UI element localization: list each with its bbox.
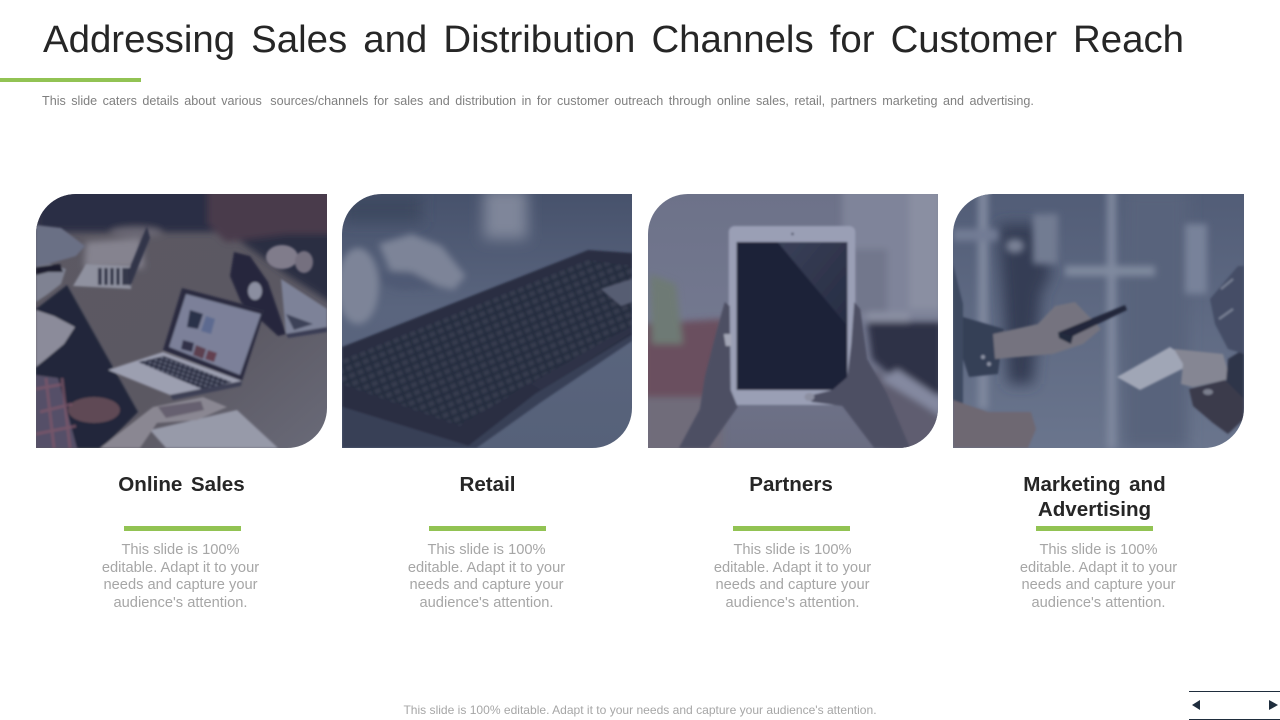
right laptops: [281, 279, 327, 334]
description: This slide is 100%: [1039, 542, 1158, 558]
description: audience's attention.: [420, 595, 554, 611]
description: needs and capture your: [716, 577, 870, 593]
photo: laptops on a wooden table: [36, 194, 327, 448]
footer note: This slide is 100% editable. Adapt it to your needs and capture your audience's attention.: [403, 703, 877, 717]
panel: partners: [648, 194, 938, 611]
green divider: [733, 526, 850, 531]
description: [714, 542, 871, 611]
description: audience's attention.: [1032, 595, 1166, 611]
heading: Partners: [749, 473, 833, 496]
heading: Online Sales: [118, 473, 245, 496]
description: [408, 542, 565, 611]
lower left hand: [953, 400, 1036, 448]
navigation arrows: [1189, 691, 1280, 720]
panel: online sales: [36, 194, 327, 611]
description: This slide is 100%: [427, 542, 546, 558]
person's hands behind: [266, 245, 298, 269]
description: audience's attention.: [726, 595, 860, 611]
right hand: [804, 302, 910, 448]
description: editable. Adapt it to your: [1020, 560, 1177, 576]
notebook and hand: [150, 410, 278, 448]
arm and phone: [993, 302, 1101, 359]
description: editable. Adapt it to your: [408, 560, 565, 576]
description: needs and capture your: [1022, 577, 1176, 593]
heading: Marketing and: [1023, 473, 1166, 496]
description: needs and capture your: [410, 577, 564, 593]
left person: [36, 225, 85, 266]
center laptop: [163, 288, 265, 381]
description: [102, 542, 259, 611]
green divider: [124, 526, 241, 531]
card and right hand: [1117, 347, 1194, 390]
panel: retail: [342, 194, 632, 611]
heading: Retail: [459, 473, 516, 496]
description: [1020, 542, 1177, 611]
green divider: [429, 526, 546, 531]
panel: marketing and advertising: [953, 194, 1244, 611]
subtitle: This slide caters details about various sources/channels for sales and distribution in for customer outreach through online sales, retail, partners marketing and advertising.: [42, 94, 1034, 108]
description: needs and capture your: [104, 577, 258, 593]
green divider: [1036, 526, 1153, 531]
left hand: [679, 302, 738, 448]
heading: [1023, 473, 1166, 521]
heading: Advertising: [1038, 498, 1151, 521]
title: Addressing Sales and Distribution Channels for Customer Reach: [43, 18, 1184, 61]
dark table edge: [36, 285, 138, 448]
description: This slide is 100%: [121, 542, 240, 558]
description: This slide is 100%: [733, 542, 852, 558]
back laptop: [73, 264, 133, 289]
photo: phone and card exchange: [953, 194, 1244, 448]
left person: [953, 267, 964, 404]
title accent line: [0, 78, 141, 82]
description: editable. Adapt it to your: [102, 560, 259, 576]
photo: hands holding a tablet: [648, 194, 938, 448]
photo: keyboard and hand: [342, 194, 632, 448]
description: audience's attention.: [114, 595, 248, 611]
description: editable. Adapt it to your: [714, 560, 871, 576]
